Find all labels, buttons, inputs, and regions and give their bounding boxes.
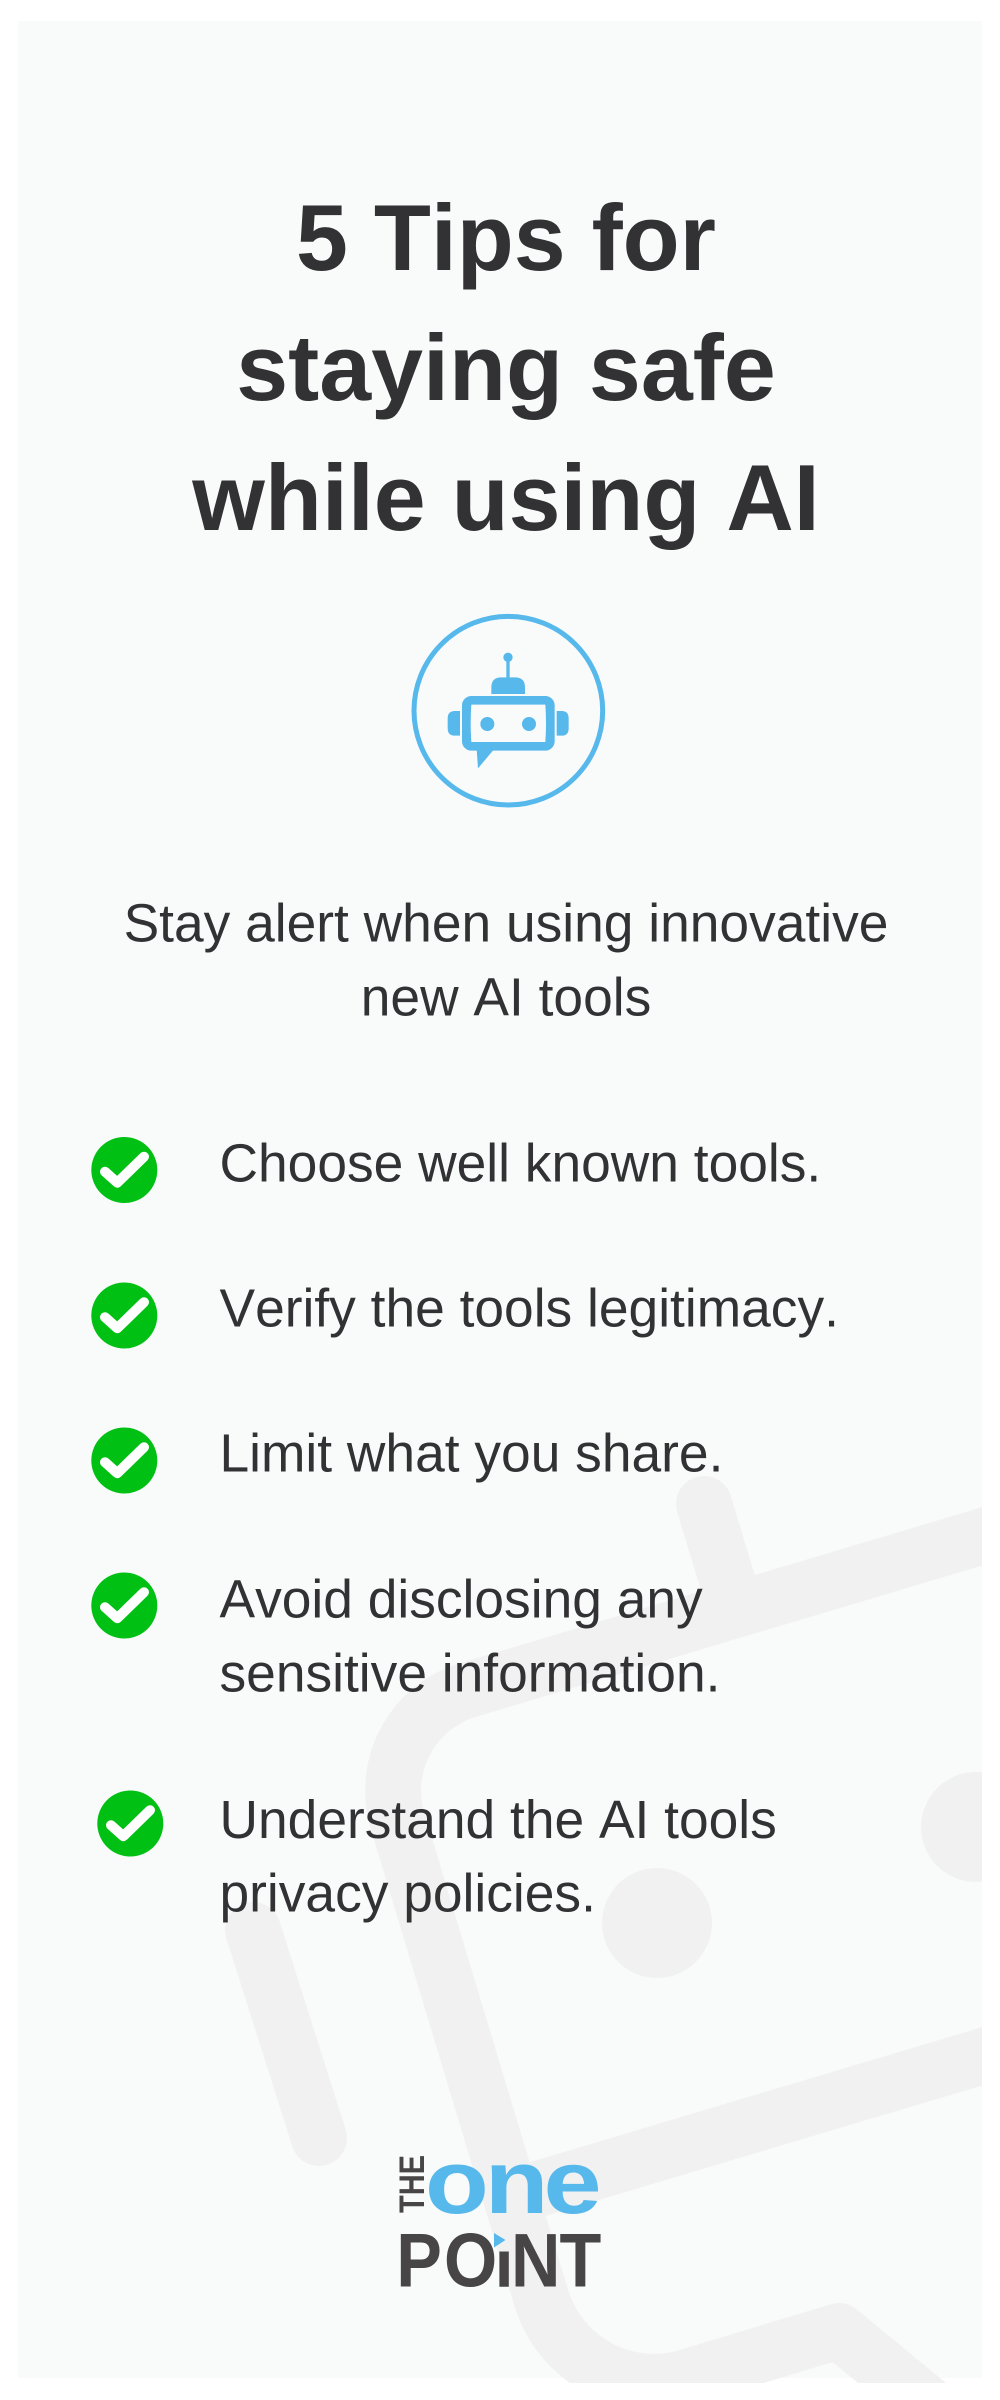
tip 3: Limit what you share. xyxy=(220,1424,723,1484)
tip 4 xyxy=(91,1570,720,1704)
tip 4: sensitive information. xyxy=(220,1644,720,1704)
icon: check 5 xyxy=(97,1790,163,1856)
icon: check 2 xyxy=(91,1282,157,1348)
icon: robot in circle xyxy=(414,616,603,805)
title xyxy=(191,186,820,550)
subtitle: new AI tools xyxy=(361,968,651,1028)
tip 5: privacy policies. xyxy=(220,1864,596,1924)
title: 5 Tips for xyxy=(296,186,716,290)
tip 1: Choose well known tools. xyxy=(220,1134,821,1194)
logo: The One Point xyxy=(400,2156,601,2287)
subtitle: Stay alert when using innovative xyxy=(124,894,888,954)
logo: The One Point: POiNT xyxy=(396,2219,601,2304)
title: while using AI xyxy=(191,446,820,550)
icon: check 1 xyxy=(91,1137,157,1203)
title: staying safe xyxy=(236,316,776,420)
tip 5 xyxy=(97,1790,777,1924)
logo: The One Point: one xyxy=(425,2132,602,2232)
watermark: robot outline xyxy=(253,1504,1000,2400)
icon: check 3 xyxy=(91,1428,157,1494)
tip 3 xyxy=(91,1424,723,1494)
tip 4: Avoid disclosing any xyxy=(220,1570,703,1630)
tip 2: Verify the tools legitimacy. xyxy=(220,1280,839,1338)
tip 5: Understand the AI tools xyxy=(220,1791,777,1850)
logo: The One Point: THE xyxy=(393,2155,432,2213)
icon: check 4 xyxy=(91,1572,157,1638)
subtitle xyxy=(124,894,888,1028)
